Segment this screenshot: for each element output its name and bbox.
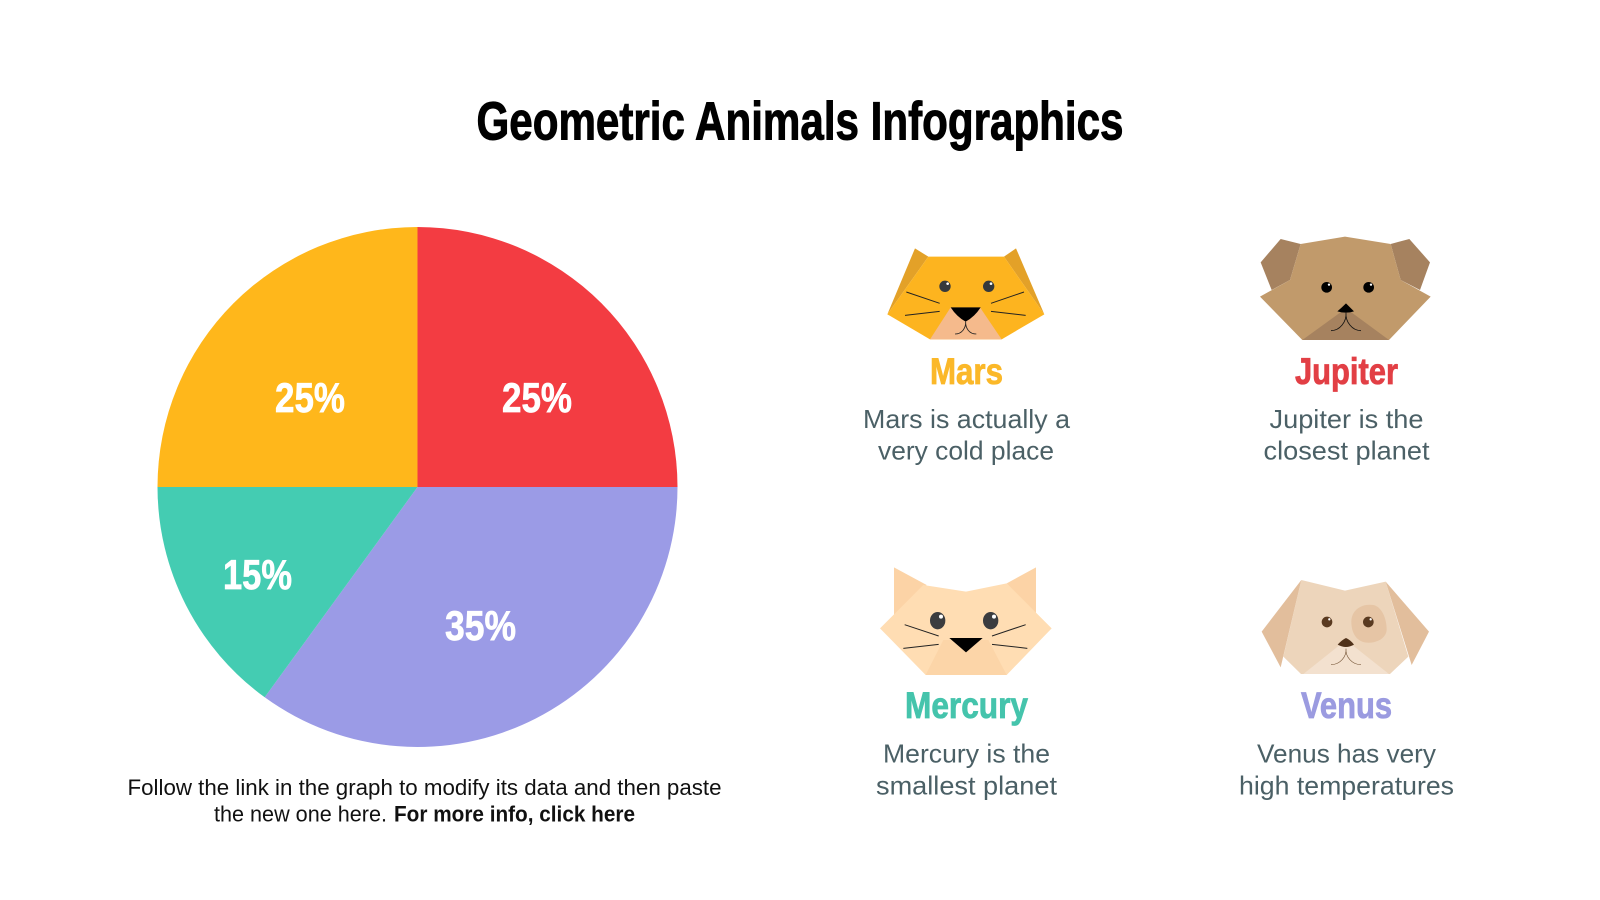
label: teal 15%: 15% bbox=[223, 551, 292, 598]
description: Mercury is the bbox=[883, 738, 1050, 768]
caption: Follow the link in the graph to modify its data and then paste bbox=[128, 775, 722, 800]
description: very cold place bbox=[878, 436, 1054, 466]
description bbox=[1264, 404, 1430, 466]
description: closest planet bbox=[1264, 436, 1430, 466]
panel: Mars bbox=[863, 248, 1071, 466]
icon: beige dog bbox=[1262, 580, 1429, 674]
slice: purple 35% bbox=[265, 487, 678, 747]
panel: Mercury bbox=[876, 567, 1058, 800]
caption: For more info, click here bbox=[394, 802, 635, 826]
panel: Jupiter bbox=[1260, 237, 1431, 466]
label: red 25%: 25% bbox=[502, 374, 572, 421]
description bbox=[876, 738, 1058, 800]
heading: Mercury bbox=[905, 685, 1028, 726]
description: smallest planet bbox=[876, 770, 1058, 800]
slice: yellow 25% bbox=[158, 227, 418, 487]
icon: cream cat bbox=[880, 567, 1052, 675]
slice: red 25% bbox=[418, 227, 678, 487]
description bbox=[863, 404, 1071, 466]
description: Venus has very bbox=[1257, 738, 1436, 768]
icon: orange cat bbox=[887, 248, 1044, 339]
description: high temperatures bbox=[1239, 770, 1454, 800]
caption bbox=[128, 775, 722, 826]
description bbox=[1239, 738, 1454, 800]
caption: the new one here. bbox=[214, 802, 387, 826]
label: yellow 25%: 25% bbox=[275, 374, 345, 421]
label: purple 35%: 35% bbox=[445, 602, 516, 649]
heading: Mars bbox=[930, 351, 1003, 392]
pie chart bbox=[158, 227, 678, 747]
panel: Venus bbox=[1239, 580, 1454, 800]
title: Geometric Animals Infographics bbox=[476, 92, 1124, 152]
slice: teal 15% bbox=[158, 487, 418, 697]
description: Jupiter is the bbox=[1270, 404, 1424, 434]
description: Mars is actually a bbox=[863, 404, 1071, 434]
heading: Venus bbox=[1301, 685, 1392, 726]
icon: brown dog bbox=[1260, 237, 1431, 340]
heading: Jupiter bbox=[1295, 351, 1398, 392]
